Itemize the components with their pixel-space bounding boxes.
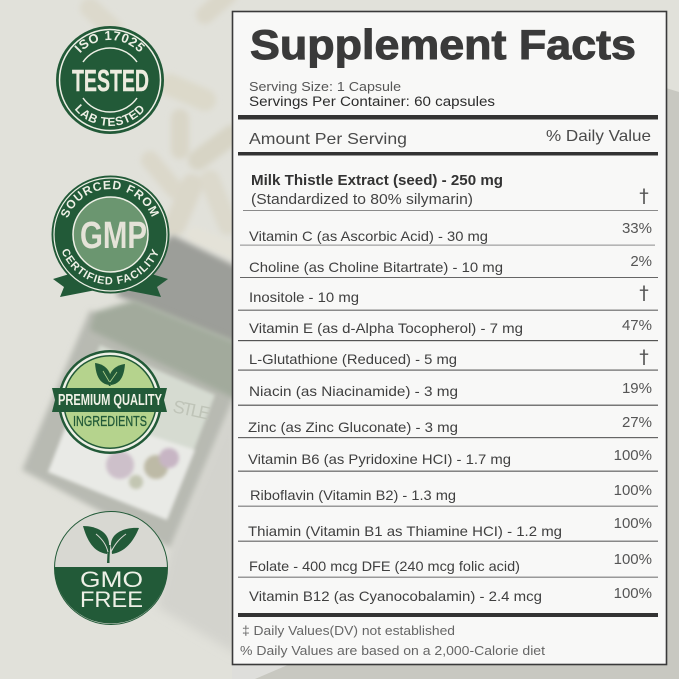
panel: supplement facts bbox=[232, 12, 666, 664]
ingredient rows: Choline (as Choline Bitartrate) - 10 mg bbox=[249, 259, 503, 275]
ingredient rows: Riboflavin (Vitamin B2) - 1.3 mg bbox=[250, 487, 456, 503]
badge: GMP sourced: CERTIFIED FACILITY bbox=[62, 248, 158, 284]
footnotes: % Daily Values are based on a 2,000-Calorie diet bbox=[240, 643, 545, 658]
serving info: Servings Per Container: 60 capsules bbox=[249, 94, 495, 109]
badge: GMO free bbox=[54, 512, 168, 624]
serving info bbox=[249, 79, 495, 109]
column headers: Amount Per Serving bbox=[249, 131, 407, 148]
thistle flowers bbox=[106, 448, 179, 489]
title: Supplement Facts bbox=[250, 21, 636, 68]
ingredient rows: Inositole - 10 mg bbox=[249, 289, 359, 305]
badge: premium quality: PREMIUM QUALITY bbox=[58, 392, 162, 409]
ingredient rows: † bbox=[639, 282, 649, 304]
primary ingredient bbox=[251, 173, 649, 208]
ring text: ISO 17025 bbox=[74, 31, 146, 53]
ingredient rows bbox=[248, 220, 652, 604]
bottle label bbox=[48, 345, 215, 520]
ingredient rows: L-Glutathione (Reduced) - 5 mg bbox=[249, 351, 457, 367]
primary ingredient: (Standardized to 80% silymarin) bbox=[251, 192, 473, 208]
ingredient rows: 100% bbox=[614, 515, 652, 532]
bottle shoulder bbox=[90, 300, 245, 400]
ingredient rows: Zinc (as Zinc Gluconate) - 3 mg bbox=[248, 419, 458, 435]
ingredient rows: Thiamin (Vitamin B1 as Thiamine HCI) - 1.2 mg bbox=[248, 523, 562, 539]
badge: ISO 17025 tested: LAB TESTED bbox=[74, 104, 144, 126]
ribbon bbox=[53, 272, 168, 297]
ingredient rows: 100% bbox=[614, 447, 652, 464]
ingredient rows: 19% bbox=[622, 380, 652, 397]
footnotes bbox=[240, 623, 545, 658]
badge: premium quality bbox=[52, 350, 167, 454]
column headers: % Daily Value bbox=[546, 128, 651, 145]
primary ingredient: Milk Thistle Extract (seed) - 250 mg bbox=[251, 173, 503, 189]
icon: leaves bbox=[95, 363, 125, 386]
ingredient rows: Vitamin B12 (as Cyanocobalamin) - 2.4 mcg bbox=[249, 588, 542, 604]
badge: premium quality: INGREDIENTS bbox=[73, 413, 147, 430]
badge: GMP sourced: SOURCED FROM bbox=[61, 180, 160, 218]
label: GMO bbox=[80, 567, 143, 592]
ingredient rows: 27% bbox=[622, 414, 652, 431]
bottle body bbox=[22, 310, 238, 548]
ribbon label bbox=[52, 388, 167, 412]
label bbox=[80, 567, 143, 612]
footnotes: ‡ Daily Values(DV) not established bbox=[242, 623, 455, 638]
column headers bbox=[249, 128, 651, 148]
serving info: Serving Size: 1 Capsule bbox=[249, 79, 401, 94]
badge: GMP sourced bbox=[52, 176, 170, 297]
bottle cap bbox=[115, 235, 260, 345]
gmp label: GMP bbox=[80, 215, 147, 257]
ingredient rows: Vitamin C (as Ascorbic Acid) - 30 mg bbox=[249, 228, 488, 244]
shadow: bottle cast shadow bbox=[157, 388, 238, 655]
tested label: TESTED bbox=[72, 63, 149, 98]
icon: leaves bbox=[83, 526, 139, 563]
capsules bbox=[90, 0, 232, 250]
ingredient rows: 100% bbox=[614, 585, 652, 602]
label: FREE bbox=[80, 587, 143, 612]
ingredient rows: Niacin (as Niacinamide) - 3 mg bbox=[249, 383, 458, 399]
ingredient rows: 47% bbox=[622, 317, 652, 334]
right and lower shadow bbox=[232, 88, 679, 679]
ingredient rows: 2% bbox=[630, 253, 652, 270]
badge: ISO 17025 tested bbox=[56, 26, 164, 134]
ingredient rows: † bbox=[639, 346, 649, 368]
ingredient rows: Folate - 400 mcg DFE (240 mcg folic acid) bbox=[249, 558, 520, 574]
ingredient rows: 33% bbox=[622, 220, 652, 237]
ingredient rows: 100% bbox=[614, 482, 652, 499]
ingredient rows: Vitamin E (as d-Alpha Tocopherol) - 7 mg bbox=[249, 320, 523, 336]
bottle label name: STLE bbox=[171, 396, 212, 424]
primary ingredient: † bbox=[639, 185, 649, 207]
ingredient rows: Vitamin B6 (as Pyridoxine HCI) - 1.7 mg bbox=[248, 451, 511, 467]
ingredient rows: 100% bbox=[614, 551, 652, 568]
